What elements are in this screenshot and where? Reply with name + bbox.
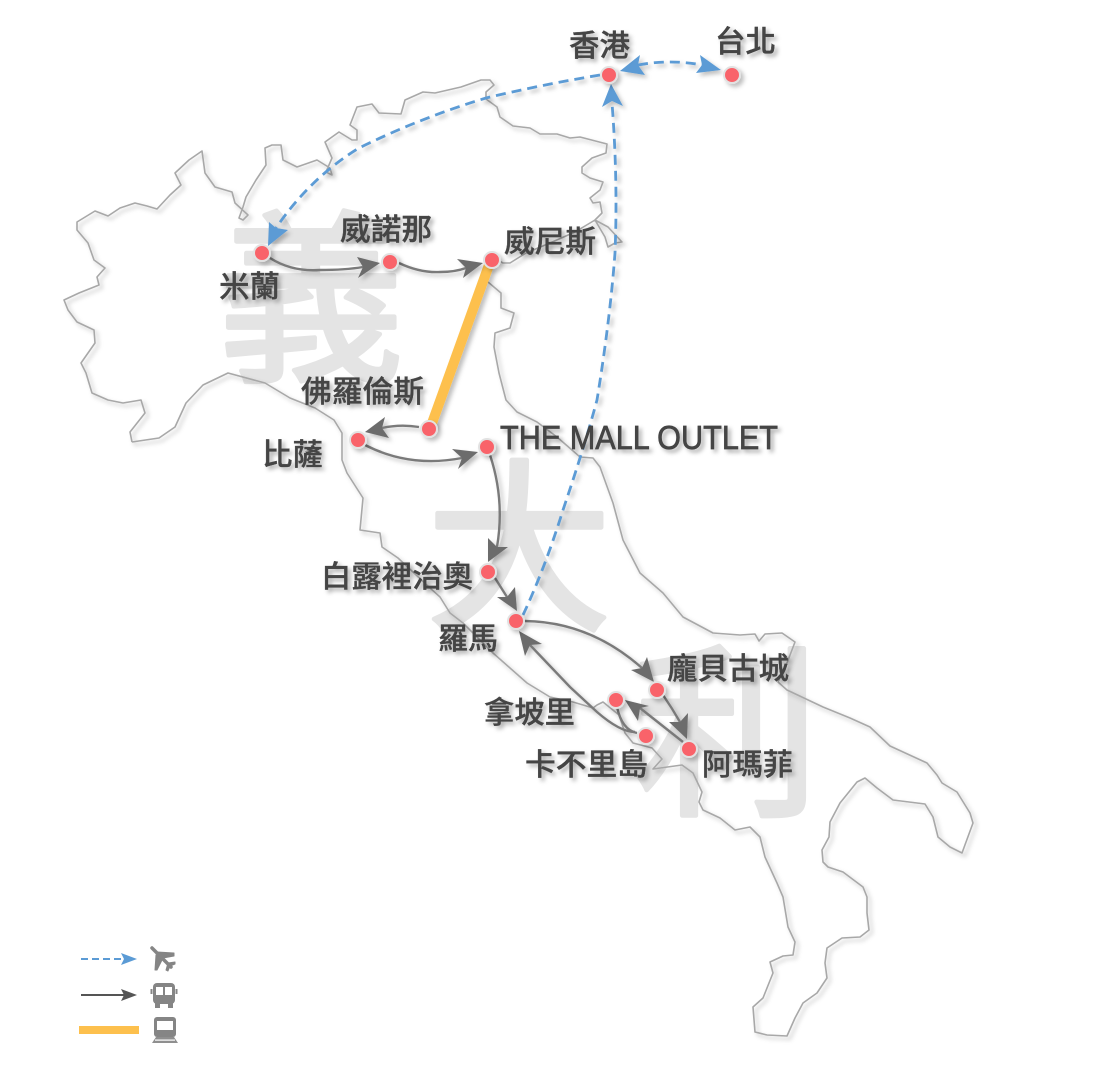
label: Capri: 卡不里島 xyxy=(525,749,648,782)
Bagnoregio to Rome xyxy=(495,578,517,611)
flight routes (dashed blue) xyxy=(268,55,721,615)
flight: Hong Kong to Milan xyxy=(268,75,600,246)
background title: 義大利 xyxy=(218,200,820,841)
city labels xyxy=(219,26,793,782)
Bagnoregio xyxy=(480,564,496,580)
Amalfi to Naples xyxy=(625,700,683,742)
Naples xyxy=(608,692,624,708)
flight: Hong Kong and Taipei xyxy=(620,55,721,75)
Verona to Venice xyxy=(399,259,483,278)
Amalfi xyxy=(681,741,697,757)
icon: train xyxy=(152,1017,178,1043)
background title: 義大利: 義 xyxy=(218,200,404,407)
Capri to Rome xyxy=(519,631,635,732)
Pisa xyxy=(350,432,366,448)
legend xyxy=(79,948,178,1043)
Capri xyxy=(638,728,654,744)
label: The Mall Outlet: THE MALL OUTLET xyxy=(500,419,778,456)
label: Hong Kong: 香港 xyxy=(569,30,630,63)
label: Milan: 米蘭 xyxy=(219,271,280,304)
Hong Kong xyxy=(601,67,617,83)
label: Verona: 威諾那 xyxy=(340,214,432,247)
label: Taipei: 台北 xyxy=(715,26,776,59)
bus routes (grey arrows) xyxy=(270,257,688,742)
city markers xyxy=(254,67,740,757)
Florence xyxy=(421,421,437,437)
train route: Venice to Florence xyxy=(431,265,489,426)
flight: Rome to Hong Kong xyxy=(523,84,623,615)
label: Pompeii: 龐貝古城 xyxy=(667,653,789,686)
label: Venice: 威尼斯 xyxy=(504,226,596,259)
Pompeii to Amalfi xyxy=(663,695,688,739)
icon: bus xyxy=(150,983,178,1008)
label: Rome: 羅馬 xyxy=(438,623,498,656)
Milan to Verona xyxy=(270,257,380,278)
Pompeii xyxy=(649,682,665,698)
Milan xyxy=(254,245,270,261)
Verona xyxy=(382,254,398,270)
label: Naples: 拿坡里 xyxy=(484,697,575,730)
Taipei xyxy=(724,67,740,83)
The Mall Outlet xyxy=(479,439,495,455)
Venice xyxy=(484,252,500,268)
background title: 義大利: 利 xyxy=(634,634,820,841)
label: Florence: 佛羅倫斯 xyxy=(301,376,424,409)
Pisa to Mall xyxy=(365,445,478,469)
label: Amalfi: 阿瑪菲 xyxy=(702,749,793,782)
Rome to Pompeii xyxy=(525,621,654,682)
map outline of Italy xyxy=(64,80,973,1036)
legend: train bar xyxy=(79,1026,139,1034)
Rome xyxy=(508,613,524,629)
Naples to Capri xyxy=(617,707,637,733)
background title: 義大利: 大 xyxy=(426,449,612,656)
legend: flight arrow xyxy=(81,953,137,965)
Florence to Pisa xyxy=(365,417,419,438)
label: Bagnoregio: 白露裡治奧 xyxy=(321,561,473,594)
Mall to Bagnoregio xyxy=(488,455,508,562)
icon: airplane xyxy=(152,948,175,971)
label: Pisa: 比薩 xyxy=(262,439,323,472)
legend: bus arrow xyxy=(81,989,137,1001)
